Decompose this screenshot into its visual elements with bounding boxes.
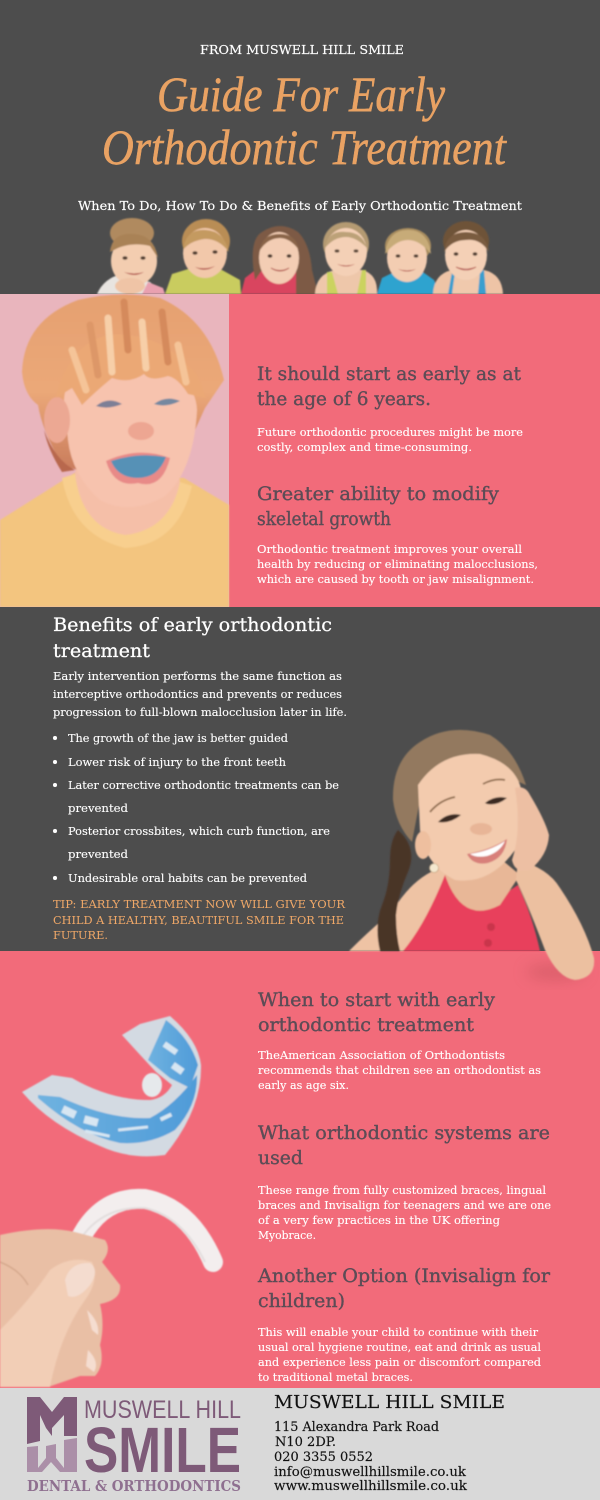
heading: skeletal growth: Greater ability to modify [257,483,499,505]
panel: coral background, start early [0,294,600,607]
text: another option [258,1325,542,1384]
contact details: 020 3355 0552 [274,1450,373,1465]
text: systems: braces and Invisalign for teenagers and we are one [258,1198,551,1212]
aligner [78,1199,213,1262]
eyes and brows [430,780,505,812]
heading: when to start: When to start with early [258,989,495,1011]
text: early intervention: interceptive orthodontics and prevents or reduces [53,687,342,701]
text: another option: This will enable your child to continue with their [258,1325,538,1339]
text: overall health: health by reducing or eliminating malocclusions, [257,557,538,571]
heading: when to start: orthodontic treatment [258,1014,474,1036]
list: benefits: prevented [68,847,129,861]
heading: another option: Another Option (Invisalign for [257,1265,551,1287]
heading: systems used: What orthodontic systems are [258,1122,550,1144]
text: future procedures [257,425,523,454]
logo: Muswell Hill Smile: SMILE [84,1414,241,1486]
mouth with blue guard [106,453,170,484]
back hair [22,294,224,470]
thumb nail [65,1263,95,1297]
heading: skeletal growth [257,483,499,530]
list: benefits: Later corrective orthodontic treatments can be [68,778,339,792]
list: benefits: Lower risk of injury to the front teeth [68,755,287,769]
text: early intervention: progression to full-blown malocclusion later in life. [53,705,347,719]
contact details: www.muswellhillsmile.co.uk [274,1479,467,1494]
heading: start early [257,363,521,410]
photo: blue and clear myobrace appliance [22,1016,201,1156]
text: another option: usual oral hygiene routine, eat and drink as usual [258,1340,541,1354]
child 5 [377,228,440,294]
right arm [516,860,594,980]
red dress [403,875,540,951]
logo: Muswell Hill Smile: DENTAL & ORTHODONTICS [27,1477,241,1495]
fringe [56,334,206,405]
text: early intervention [53,669,347,719]
text: future procedures: costly, complex and time-consuming. [257,440,472,454]
panel: benefits background [0,607,600,951]
child 4 [315,222,377,294]
hand [512,787,549,871]
list: benefits: Posterior crossbites, which curb function, are [68,824,330,838]
heading: when to start [258,989,495,1036]
title: Guide For Early [157,66,446,122]
left shoulder and arm [349,868,470,951]
text: American Association: recommends that children see an orthodontist as [258,1063,541,1077]
photo: boy with blue mouth guard [0,294,229,607]
photo: row of six children [97,218,503,294]
text: another option: and experience less pain or discomfort compared [258,1355,542,1369]
heading: benefits: treatment [53,640,150,662]
frame openings [61,1042,185,1138]
child 3 [241,226,318,294]
child 6 [433,221,503,294]
photo: smiling girl [349,730,594,981]
neck [445,850,520,911]
contact heading: MUSWELL HILL SMILE [274,1392,505,1413]
text: systems: Myobrace. [258,1228,316,1242]
subtitle: When To Do, How To Do & Benefits of Early Orthodontic Treatment [78,198,522,213]
contact details: 115 Alexandra Park Road [274,1420,439,1435]
child 1 [97,218,165,294]
heading: start early: It should start as early as at [257,363,521,385]
text: American Association: TheAmerican Association of Orthodontists [258,1048,505,1062]
footer background [0,1388,600,1500]
text: systems: of a very few practices in the UK offering [258,1213,501,1227]
heading: start early: the age of 6 years. [257,388,431,410]
eyebrow: from Muswell Hill Smile: FROM MUSWELL HILL SMILE [200,43,404,57]
smile [467,839,507,864]
fingers and hand [0,1229,120,1387]
list: benefits [53,731,339,885]
dress buttons [487,923,495,931]
contact details: N10 2DP. [275,1435,336,1450]
contact details: info@muswellhillsmile.co.uk [274,1465,466,1480]
callout: tip: TIP: EARLY TREATMENT NOW WILL GIVE YOUR [53,897,345,911]
text: American Association [258,1048,541,1092]
text: overall health: Orthodontic treatment improves your overall [257,542,522,556]
face [418,754,524,881]
text: systems: These range from fully customized braces, lingual [258,1183,546,1197]
heading: another option: children) [258,1290,345,1312]
text: early intervention: Early intervention performs the same function as [53,669,342,683]
logo: Muswell Hill Smile [27,1396,241,1495]
heading: benefits: Benefits of early orthodontic [53,614,332,636]
blue arch frame [38,1075,197,1143]
logo wordmark: MUSWELL HILL [84,1396,241,1424]
eyes [96,400,122,408]
text: another option: to traditional metal braces. [258,1370,413,1384]
heading: another option [257,1265,551,1312]
text: overall health: which are caused by tooth or jaw misalignment. [257,572,534,586]
braid [377,830,411,951]
text: future procedures: Future orthodontic procedures might be more [257,425,523,439]
contact details [274,1420,467,1494]
ear [44,397,70,443]
heading: skeletal growth: skeletal growth [257,508,391,530]
text: systems [258,1183,551,1242]
title: Orthodontic Treatment [102,119,507,175]
heading: benefits [53,614,332,662]
list: benefits: Undesirable oral habits can be prevented [68,871,308,885]
heading: systems used [258,1122,550,1169]
clear shell [22,1016,201,1156]
neck [75,440,180,535]
list: benefits: prevented [68,801,129,815]
face [64,368,197,507]
callout: tip: FUTURE. [53,928,108,942]
heading: systems used: used [258,1147,303,1169]
nose [470,823,492,835]
nose [128,422,154,440]
logo mark [27,1397,77,1472]
photo: clear aligner held in hand [0,1199,213,1387]
text: American Association: early as age six. [258,1078,349,1092]
title [102,66,507,175]
panel: when to start background [0,951,600,1388]
child 2 [165,219,241,294]
hair [393,730,526,842]
header panel background [0,0,600,294]
callout: tip [53,897,345,942]
shirt [0,472,229,607]
callout: tip: CHILD A HEALTHY, BEAUTIFUL SMILE FOR THE [53,913,344,927]
text: overall health [257,542,538,586]
list: benefits: The growth of the jaw is better guided [68,731,289,745]
